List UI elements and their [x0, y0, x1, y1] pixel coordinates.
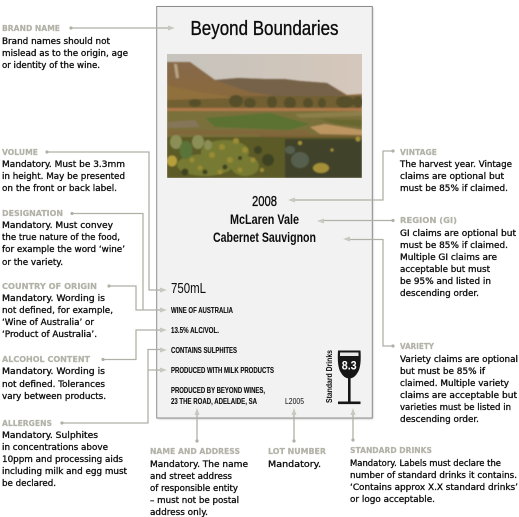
callout: standard drinks: or logo acceptable. [350, 494, 435, 504]
region text: McLaren Vale [230, 211, 299, 227]
callout: name and address: address only. [150, 507, 208, 517]
standard drinks vertical text: Standard Drinks [324, 350, 334, 403]
callout: volume: in height. May be presented [2, 171, 125, 181]
producer address text: PRODUCED BY BEYOND WINES, [171, 386, 265, 395]
callout: brand name [2, 24, 128, 70]
callout: allergens [2, 419, 128, 488]
callout: allergens: be declared. [2, 478, 56, 488]
callout: region: must be 85% if claimed. [400, 240, 508, 250]
arrow: country of origin [107, 284, 167, 312]
arrow: region [317, 218, 395, 224]
lot number text: L2005 [285, 397, 305, 406]
callout: name and address: NAME AND ADDRESS [150, 447, 240, 456]
callout: name and address: of responsible entity [150, 483, 238, 493]
callout: region: acceptable but must [400, 264, 491, 274]
callout: country of origin: COUNTRY OF ORIGIN [2, 282, 97, 291]
callout: allergens: Mandatory. Sulphites [2, 430, 98, 440]
callout: volume: on the front or back label. [2, 183, 117, 193]
callout: standard drinks: STANDARD DRINKS [350, 446, 432, 455]
callout: standard drinks: ‘Contains approx X.X standard drinks’ [350, 482, 518, 492]
icon: standard drinks wine glass [338, 350, 361, 404]
callout: name and address [150, 447, 248, 517]
callout: vintage [399, 148, 512, 193]
arrow: volume [45, 150, 167, 292]
variety text: Cabernet Sauvignon [213, 229, 316, 245]
callout: standard drinks: Mandatory. Labels must declare the [350, 458, 501, 468]
panel: wine label [157, 6, 373, 419]
callout: brand name: or identity of the wine. [2, 60, 100, 70]
callout: volume [2, 148, 125, 193]
callout: country of origin: not defined, for example, [2, 305, 113, 315]
callout: alcohol content: Mandatory. Wording is [2, 366, 105, 376]
callout: region: Multiple GI claims are [400, 252, 497, 262]
callout: variety: claimed. Multiple variety [400, 378, 509, 388]
callout: vintage: must be 85% if claimed. [400, 183, 508, 193]
producer address text [171, 386, 265, 406]
callout: brand name: mislead as to the origin, age [2, 48, 128, 58]
callout: volume: VOLUME [2, 148, 38, 157]
callout: alcohol content: ALCOHOL CONTENT [2, 355, 91, 364]
callout: region: be 95% and listed in [400, 276, 491, 286]
arrow: vintage [288, 149, 395, 202]
callout: standard drinks: number of standard drinks it contains. [350, 470, 517, 480]
callout: variety: claims are acceptable but [400, 390, 518, 400]
callout: lot number: LOT NUMBER [268, 447, 326, 456]
callout: vintage: The harvest year. Vintage [399, 159, 512, 169]
vineyard photo [167, 54, 363, 178]
brand title: Beyond Boundaries [190, 17, 338, 40]
callout: lot number [268, 447, 326, 469]
callout: country of origin: ‘Wine of Australia’ or [2, 317, 95, 327]
alcohol text: 13.5% ALC/VOL. [171, 326, 219, 335]
callout: designation: or the variety. [2, 257, 63, 267]
callout: allergens: 10ppm and processing aids [2, 454, 123, 464]
producer address text: 23 THE ROAD, ADELAIDE, SA [171, 397, 257, 406]
callout: variety: varieties must be listed in [400, 402, 511, 412]
callout: variety: Variety claims are optional [400, 354, 518, 364]
callout: variety [400, 342, 518, 424]
callout: variety: VARIETY [400, 342, 434, 351]
arrow: variety [343, 236, 395, 348]
callout: region: GI claims are optional but [400, 228, 517, 238]
callout: allergens: including milk and egg must [2, 466, 128, 476]
callout: designation: DESIGNATION [2, 209, 63, 218]
callout: region [400, 216, 517, 298]
callout: name and address: – must not be postal [150, 495, 239, 505]
callout: designation [2, 209, 125, 267]
callout: region: REGION (GI) [400, 216, 457, 225]
callout: vintage: claims are optional but [400, 171, 505, 181]
callout: variety: descending order. [400, 414, 479, 424]
callout: brand name: BRAND NAME [2, 24, 60, 33]
icon: standard drinks wine glass: 8.3 [342, 358, 357, 372]
callout: vintage: VINTAGE [400, 148, 437, 157]
callout: allergens: ALLERGENS [2, 419, 52, 428]
arrow: alcohol content [101, 328, 167, 361]
callout: alcohol content: vary between products. [2, 391, 106, 401]
callout: designation: Mandatory. Must convey [2, 220, 113, 230]
callout: country of origin [2, 282, 113, 339]
callout: designation: for example the word ‘wine’ [2, 244, 125, 254]
milk products text: PRODUCED WITH MILK PRODUCTS [171, 366, 274, 375]
callout: brand name: Brand names should not [2, 36, 111, 46]
callout: name and address: Mandatory. The name [150, 459, 248, 469]
arrow: brand name [69, 26, 175, 30]
callout: name and address: and street address [150, 471, 232, 481]
callout: region: descending order. [400, 288, 479, 298]
callout: alcohol content: not defined. Tolerances [2, 379, 105, 389]
callout: volume: Mandatory. Must be 3.3mm [2, 159, 125, 169]
arrow: standard drinks [350, 408, 356, 442]
callout: standard drinks [350, 446, 518, 504]
arrow: allergens [60, 348, 167, 425]
callout: allergens: in concentrations above [2, 442, 108, 452]
callout: country of origin: ‘Product of Australia’. [2, 329, 97, 339]
country of origin text: WINE OF AUSTRALIA [171, 306, 233, 315]
callout: designation: the true nature of the food, [2, 232, 120, 242]
volume text: 750mL [171, 280, 206, 297]
arrow: name and address [194, 408, 200, 443]
callout: country of origin: Mandatory. Wording is [2, 293, 105, 303]
callout: alcohol content [2, 355, 106, 401]
callout: lot number: Mandatory. [268, 459, 321, 469]
arrow: lot number [292, 408, 296, 443]
arrow: designation [70, 212, 143, 310]
vintage text: 2008 [252, 194, 277, 210]
sulphites text: CONTAINS SULPHITES [171, 346, 237, 355]
callout: variety: but must be 85% if [400, 366, 486, 376]
